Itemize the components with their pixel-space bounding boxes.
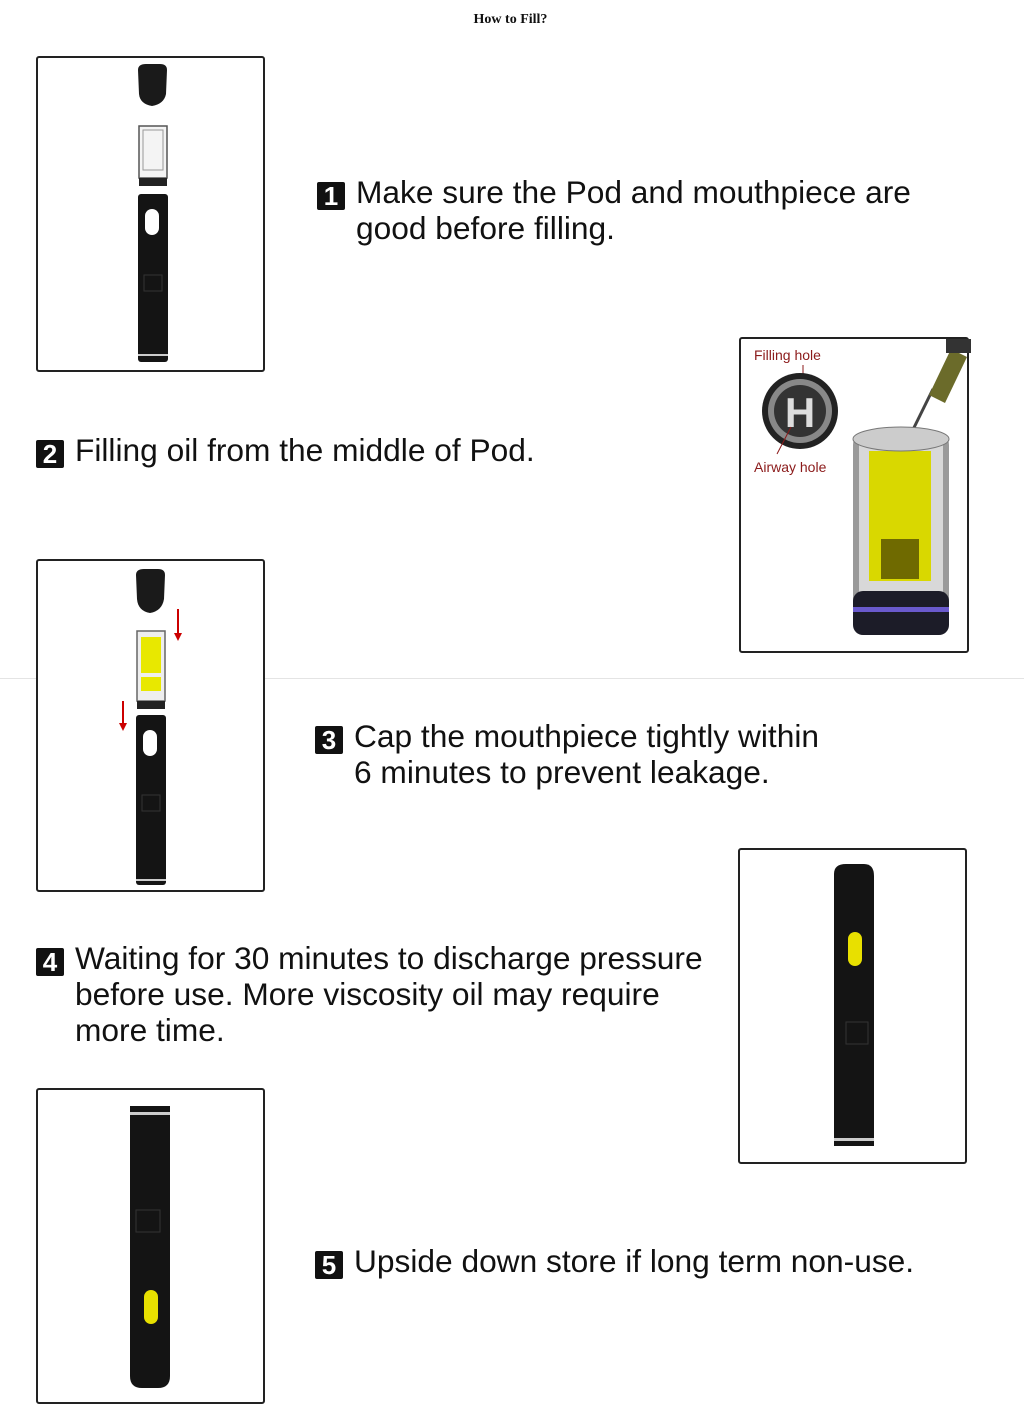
icon: mouthpiece — [138, 64, 167, 106]
step 3 text: 3 — [322, 725, 336, 755]
step 4 text: Waiting for 30 minutes to discharge pressure — [75, 940, 703, 976]
icon: filled pod — [137, 631, 165, 709]
label: filling hole — [754, 347, 821, 403]
icon: battery — [138, 194, 168, 362]
step 5 text: Upside down store if long term non-use. — [354, 1243, 914, 1279]
step 1 text: good before filling. — [356, 210, 615, 246]
panel: step 3 image — [36, 559, 265, 892]
step 4 text: more time. — [75, 1012, 225, 1048]
title: How to Fill? — [474, 12, 547, 27]
icon: upside-down pen — [130, 1106, 170, 1388]
arrows: red down — [119, 609, 182, 731]
icon: pod top view — [762, 373, 838, 449]
panel: step 4 image — [738, 848, 967, 1164]
panel: step 1 image — [36, 56, 265, 372]
step 2 text: 2 — [43, 439, 57, 469]
icon: mouthpiece — [136, 569, 165, 613]
label: filling hole: Filling hole — [754, 347, 821, 363]
step 1 text: 1 — [324, 181, 338, 211]
icon: pod — [139, 126, 167, 186]
icon: pod with oil — [853, 427, 949, 635]
label: airway hole — [754, 427, 827, 475]
step 3 text — [315, 718, 819, 790]
step 3 text: 6 minutes to prevent leakage. — [354, 754, 770, 790]
icon: pod top view: H — [785, 389, 815, 436]
panel: step 5 image — [36, 1088, 265, 1404]
panel: step 2 image — [739, 337, 969, 653]
icon: assembled pen — [834, 864, 874, 1146]
step 5 text: 5 — [322, 1250, 336, 1280]
icon: battery — [136, 715, 166, 885]
label: airway hole: Airway hole — [754, 459, 827, 475]
step 4 text — [36, 940, 703, 1048]
step 1 text — [317, 174, 911, 246]
step 1 text: Make sure the Pod and mouthpiece are — [356, 174, 911, 210]
icon: syringe — [901, 339, 971, 454]
step 2 text: Filling oil from the middle of Pod. — [75, 432, 535, 468]
step 4 text: before use. More viscosity oil may require — [75, 976, 660, 1012]
step 4 text: 4 — [43, 947, 57, 977]
step 3 text: Cap the mouthpiece tightly within — [354, 718, 819, 754]
